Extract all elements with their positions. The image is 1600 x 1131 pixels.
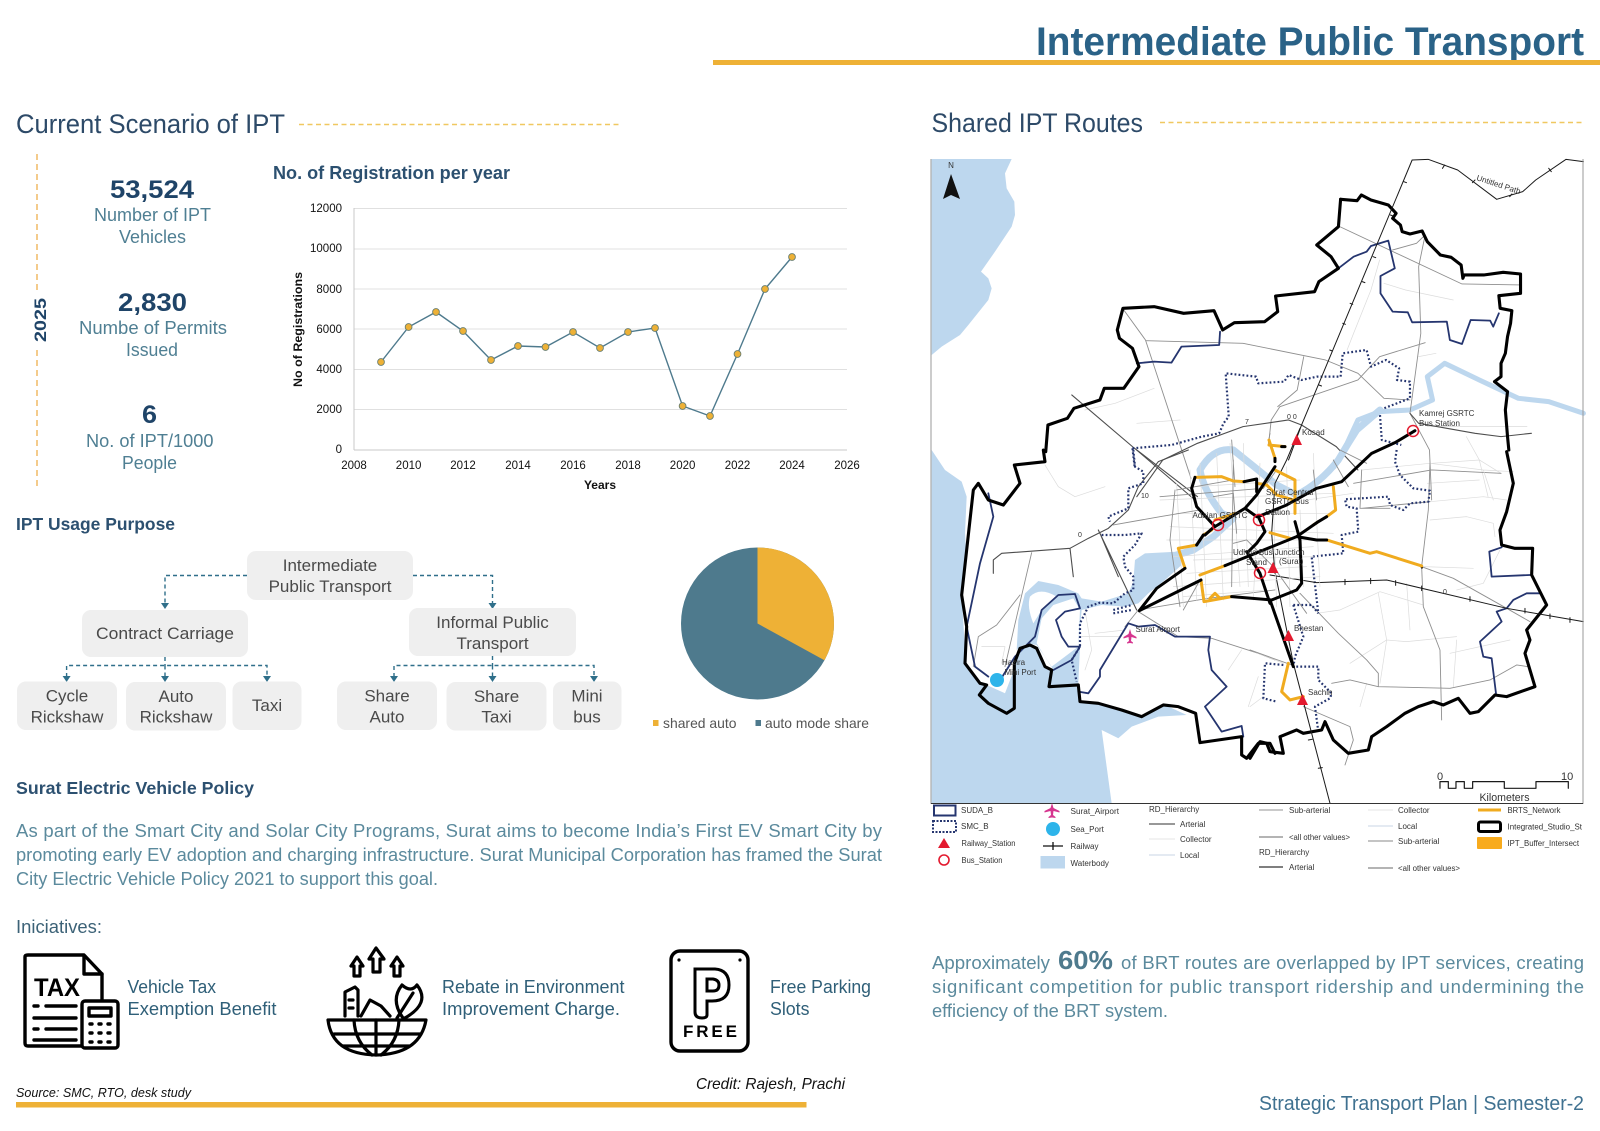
scale bar labels: 10 [1561,771,1573,783]
stat: vehicles: Number of IPT [94,204,211,225]
legend column 4: Arterial [1289,863,1315,872]
line chart: registrations per year: No of Registrations [291,272,305,387]
stat: vehicles [94,176,211,247]
legend column 3: Collector [1180,835,1212,844]
map labels: GSRTC Bus [1265,497,1309,506]
map labels: 0 [1078,532,1082,539]
box: share taxi: Taxi [481,708,512,726]
box: mini bus: Mini [571,686,603,706]
legend column 2: Waterbody [1070,859,1109,868]
box: share taxi: Share [474,687,519,706]
footer bar [16,1102,806,1108]
line chart: registrations per year: Years [584,478,616,492]
legend column 6: Integrated_Studio_St [1508,822,1583,832]
legend column 1: SUDA_B [961,806,993,815]
box: informal public transport: Transport [456,634,529,653]
stat: permits: Issued [126,339,178,360]
airport [1124,629,1136,644]
map labels: (Surat) [1279,557,1304,566]
heading: initiatives: Iniciatives: [16,917,102,937]
text block: BRT overlap: Approximately [932,952,1051,973]
legend column 2: Sea_Port [1070,825,1105,834]
line chart: registrations per year: 2000 [316,404,342,416]
box: taxi [232,682,302,730]
legend column 5: <all other values> [1398,864,1460,873]
text block: BRT overlap: of BRT routes are overlapped by IPT services, creating [1121,952,1584,973]
heading: usage purpose: IPT Usage Purpose [16,514,175,534]
icon: free parking [671,951,748,1051]
icon: free parking: FREE [683,1022,737,1041]
water: sea south and estuary [932,450,1187,803]
railway stations [1268,434,1308,705]
line chart: registrations per year: 2020 [670,460,695,472]
legend column 1: SMC_B [961,822,989,831]
legend column 4: <all other values> [1289,833,1350,842]
map labels: Adajan GSRTC [1192,511,1248,520]
map labels: Sachin [1308,688,1332,697]
box: IPT: Intermediate [283,556,377,575]
year label: 2025 [31,298,50,342]
line chart: registrations per year [291,203,860,492]
north arrow [943,161,960,199]
legend column 2: Surat_Airport [1070,807,1120,816]
text: rebate: Improvement Charge. [442,998,620,1019]
line chart: registrations per year: 2012 [450,460,476,472]
line chart: registrations per year: 2026 [834,460,860,472]
map labels [1002,173,1522,697]
text block: BRT overlap [932,945,1584,1021]
map labels: 7 [1245,419,1249,426]
map labels: 10 [1141,493,1149,500]
stat: vehicles: 53,524 [110,176,194,204]
stat: vehicles: Vehicles [119,226,186,247]
line chart: registrations per year: 2010 [396,460,421,472]
stat: per 1000 people: 6 [142,401,157,429]
legend column 3: Local [1180,851,1199,860]
legend column 5: Local [1398,822,1417,831]
line chart: registrations per year: 2022 [725,460,750,472]
map labels: Udhna Bus Junction [1233,548,1305,557]
pie chart: mode share [653,548,869,731]
sea port [990,673,1004,687]
footer label: Strategic Transport Plan | Semester-2 [1259,1093,1584,1115]
network east part [1250,450,1583,803]
legend column 5: Collector [1398,806,1430,815]
stat: permits: Numbe of Permits [79,317,227,338]
heading: current scenario: Current Scenario of IPT [16,109,285,139]
box: IPT [247,551,413,600]
legend column 3 [1149,805,1212,860]
map labels: Bhestan [1294,624,1323,633]
network central BRTS and IPT routes [1113,410,1422,613]
credit: Credit: Rajesh, Prachi [696,1076,845,1093]
map labels: Mini Port [1004,668,1037,677]
legend column 6: BRTS_Network [1508,806,1561,815]
box: cycle rickshaw: Rickshaw [31,708,104,726]
line chart: registrations per year: 8000 [316,284,342,296]
box: share auto [337,682,437,730]
box: cycle rickshaw: Cycle [46,686,88,706]
text block: BRT overlap: significant competition for public transport ridership and undermining the [932,976,1584,997]
pie legend: auto mode share [765,715,869,731]
map frame [931,159,1583,804]
box: informal public transport [409,608,576,656]
box: auto rickshaw [126,682,226,730]
map markers [990,426,1418,705]
stat: per 1000 people [86,401,214,473]
box: mini bus [553,682,622,730]
scale bar labels: 0 [1437,771,1443,783]
box: auto rickshaw: Auto [159,687,193,706]
box: taxi: Taxi [252,696,282,715]
box: share auto: Share [364,686,410,706]
map labels: Hazira [1002,658,1026,667]
title [713,20,1600,65]
box: share auto: Auto [370,708,404,726]
box: share taxi [446,682,546,730]
map labels: Kosad [1302,428,1325,437]
map labels: Untitled Path [1475,173,1522,196]
north arrow: N [948,161,954,170]
line chart: registrations per year: 4000 [316,364,342,376]
legend column 1 [933,806,1016,865]
panel: 2025 statistics [31,154,227,487]
text: free parking: Slots [770,998,810,1019]
legend column 1: Railway_Station [962,839,1016,848]
box: informal public transport: Informal Public [436,613,549,632]
map legend [933,803,1583,873]
tree diagram: IPT usage [17,551,622,730]
line chart: registrations per year: 0 [336,444,342,456]
stat: per 1000 people: No. of IPT/1000 [86,430,214,451]
text block: EV policy: promoting early EV adoption and charging infrastructure. Surat Municipal Corporation has framed the Surat [16,844,882,865]
line chart: registrations per year: 12000 [310,203,342,215]
legend column 6 [1477,806,1583,849]
title: Intermediate Public Transport [1036,20,1584,64]
text: tax exemption [128,976,276,1019]
legend column 6: IPT_Buffer_Intersect [1508,839,1580,848]
text block: EV policy: As part of the Smart City and Solar City Programs, Surat aims to become India’s First EV Smart City by [16,820,883,841]
box: contract carriage: Contract Carriage [96,624,234,643]
map labels: 0 0 [1287,414,1297,421]
scale bar labels [1437,771,1573,804]
text: tax exemption: Exemption Benefit [128,998,276,1019]
map labels: 0 [1443,589,1447,596]
legend column 4: RD_Hierarchy [1259,848,1309,857]
legend column 4 [1259,806,1350,872]
stat: per 1000 people: People [122,452,177,473]
network west part [962,450,1275,758]
map labels: Kamrej GSRTC [1419,409,1475,418]
icon: tax: TAX [34,974,80,1002]
network north part [1046,159,1583,500]
text block: EV policy: City Electric Vehicle Policy 2021 to support this goal. [16,868,438,889]
box: cycle rickshaw [17,682,117,730]
bus stations [1212,426,1418,578]
icon: tax [25,955,118,1048]
legend column 2: Railway [1070,842,1099,851]
box: auto rickshaw: Rickshaw [140,708,213,726]
water: sea north [932,159,1015,355]
line chart: registrations per year: 2014 [505,460,531,472]
text: rebate [442,976,624,1019]
pie legend: shared auto [663,715,737,731]
map labels: Bus Station [1419,419,1460,428]
line chart: registrations per year: 2008 [341,460,367,472]
legend column 5: Sub-arterial [1398,837,1440,846]
heading: shared routes: Shared IPT Routes [932,108,1143,138]
stat: permits [79,289,227,360]
legend column 3: Arterial [1180,820,1206,829]
stat: permits: 2,830 [118,289,187,317]
scale bar labels: Kilometers [1480,792,1530,804]
map labels: Station [1265,508,1290,517]
text: free parking [770,976,871,1019]
box: IPT: Public Transport [269,577,392,596]
text: rebate: Rebate in Environment [442,976,624,997]
line chart: registrations per year: 6000 [316,324,342,336]
legend column 3: RD_Hierarchy [1149,805,1199,814]
box: mini bus: bus [573,708,601,726]
highlight: 60 percent: 60% [1058,945,1113,975]
legend column 1: Bus_Station [962,856,1002,865]
icon: environment globe [328,948,426,1055]
source note: Source: SMC, RTO, desk study [16,1085,192,1100]
text: free parking: Free Parking [770,976,871,997]
line chart: registrations per year: 2018 [615,460,641,472]
legend column 2 [1040,803,1120,868]
map labels: Stand [1246,558,1267,567]
box: contract carriage [82,610,248,657]
legend column 4: Sub-arterial [1289,806,1331,815]
pie legend [653,715,869,731]
heading: registrations chart: No. of Registration per year [273,163,510,183]
map labels: Surat Central [1266,488,1313,497]
line chart: registrations per year: 2024 [779,460,805,472]
map: shared IPT routes [931,159,1583,804]
line chart: registrations per year: 2016 [560,460,586,472]
line chart: registrations per year: 10000 [310,243,342,255]
heading: EV policy: Surat Electric Vehicle Policy [16,778,254,798]
text block: BRT overlap: efficiency of the BRT system. [932,1000,1168,1021]
map labels: Surat Airport [1136,625,1181,634]
legend column 5 [1368,806,1460,873]
text: tax exemption: Vehicle Tax [128,976,217,997]
text block: EV policy [16,820,883,889]
